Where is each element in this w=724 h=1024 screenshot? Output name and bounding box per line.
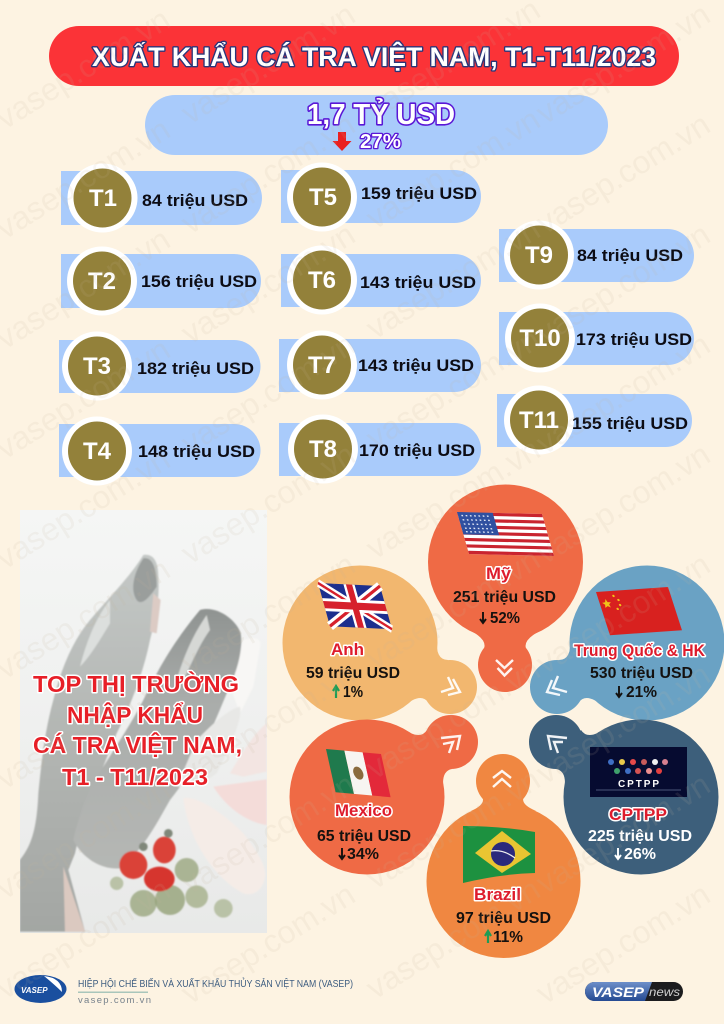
- market bubble: Trung Quốc & HK: 21%: [626, 684, 657, 701]
- footer: VASEP logo: [14, 975, 66, 1003]
- market bubble: Brazil: [426, 754, 580, 958]
- month T3: [59, 332, 260, 400]
- month T8: 170 triệu USD: [359, 441, 475, 460]
- icon: down arrow: [615, 848, 621, 859]
- market bubble: Brazil: 97 triệu USD: [456, 910, 551, 927]
- footer: VASEP news badge: VASEP: [592, 984, 645, 1000]
- icon: chevrons right: [441, 677, 460, 695]
- month T4: T4: [83, 438, 112, 465]
- month T6: 143 triệu USD: [360, 273, 476, 292]
- month T5: [281, 162, 481, 232]
- footer: VASEP news badge: [585, 982, 683, 1001]
- watermark: vasep.com.vn: vasep.com.vn: [360, 871, 546, 1006]
- market bubble: Mỹ: 251 triệu USD: [453, 589, 556, 606]
- watermark: vasep.com.vn: vasep.com.vn: [175, 546, 361, 681]
- market bubble: Anh: 59 triệu USD: [306, 665, 400, 682]
- market bubble: Mexico: Mexico: [335, 801, 392, 820]
- watermark: vasep.com.vn: vasep.com.vn: [360, 541, 546, 676]
- watermark: vasep.com.vn: vasep.com.vn: [530, 656, 716, 791]
- watermark: vasep.com.vn: vasep.com.vn: [360, 101, 546, 236]
- summary panel: total export value: 27%: [360, 131, 401, 153]
- watermark: vasep.com.vn: vasep.com.vn: [530, 546, 716, 681]
- month T7: T7: [308, 352, 336, 379]
- icon: China flag: [596, 587, 682, 635]
- market bubble: CPTPP: [529, 715, 718, 874]
- market bubble: Mexico: 65 triệu USD: [317, 828, 411, 845]
- icon: CPTPP logo: CPTPP: [618, 779, 659, 790]
- month T4: 148 triệu USD: [138, 442, 255, 461]
- summary panel: total export value: [145, 95, 608, 155]
- market bubble: Mexico: 34%: [347, 846, 379, 863]
- month T11: 155 triệu USD: [572, 414, 688, 433]
- month T2: 156 triệu USD: [141, 272, 257, 291]
- icon: down arrow: [616, 686, 622, 697]
- month T11: [497, 386, 692, 454]
- icon: chevrons left: [547, 676, 567, 695]
- month T1: [61, 164, 262, 232]
- watermark: vasep.com.vn: vasep.com.vn: [175, 216, 361, 351]
- watermark: vasep.com.vn: vasep.com.vn: [360, 651, 546, 786]
- market bubble: CPTPP: CPTPP: [609, 805, 667, 824]
- illustration: pangasius fish and tomatoes: [20, 555, 267, 932]
- market bubble: Anh: 1%: [343, 684, 363, 701]
- watermark: vasep.com.vn: vasep.com.vn: [530, 106, 716, 241]
- title banner: XUẤT KHẨU CÁ TRA VIỆT NAM, T1-T11/2023: [92, 41, 656, 72]
- footer: organisation name: [78, 977, 353, 1006]
- month T9: [499, 220, 694, 290]
- month T10: T10: [519, 325, 561, 352]
- month T3: T3: [83, 353, 111, 380]
- heading: top import markets: NHẬP KHẨU: [67, 701, 203, 728]
- market bubble: CPTPP: 225 triệu USD: [588, 828, 692, 845]
- footer: VASEP news badge: news: [649, 985, 680, 999]
- summary panel: total export value: 1,7 TỶ USD: [307, 97, 455, 131]
- watermark: vasep.com.vn: vasep.com.vn: [175, 766, 361, 901]
- heading: top import markets: [33, 670, 242, 790]
- icon: chevrons up: [493, 771, 511, 787]
- watermark: vasep.com.vn: vasep.com.vn: [360, 211, 546, 346]
- heading: top import markets: TOP THỊ TRƯỜNG: [33, 670, 239, 697]
- month T10: 173 triệu USD: [576, 330, 692, 349]
- icon: chevrons down: [496, 660, 513, 676]
- watermark: vasep.com.vn: vasep.com.vn: [360, 761, 546, 896]
- icon: UK flag: [318, 583, 392, 629]
- month T9: T9: [525, 242, 553, 269]
- month T10: [499, 304, 694, 372]
- icon: Mexico flag: [326, 749, 391, 797]
- month T8: [279, 414, 481, 484]
- month T7: [279, 330, 481, 400]
- heading: top import markets: T1 - T11/2023: [62, 764, 208, 790]
- icon: red down arrow: [332, 132, 352, 151]
- icon: chevrons up-right: [441, 736, 460, 753]
- footer: organisation name: vasep.com.vn: [78, 995, 151, 1006]
- month T1: T1: [89, 185, 117, 212]
- watermark: vasep.com.vn: vasep.com.vn: [175, 106, 361, 241]
- title banner: [49, 26, 679, 86]
- month T5: T5: [309, 184, 337, 211]
- month T7: 143 triệu USD: [358, 356, 474, 375]
- month T5: 159 triệu USD: [361, 184, 477, 203]
- market bubble: Mỹ: 52%: [490, 610, 520, 627]
- icon: US flag: [457, 512, 554, 556]
- icon: CPTPP logo: [590, 747, 687, 797]
- month T6: [281, 246, 481, 314]
- footer: organisation name: HIỆP HỘI CHẾ BIẾN VÀ XUẤT KHẨU THỦY SẢN VIỆT NAM (VASEP): [78, 977, 353, 990]
- watermark: vasep.com.vn: vasep.com.vn: [175, 326, 361, 461]
- month T1: 84 triệu USD: [142, 191, 248, 210]
- market bubble: Anh: [282, 566, 477, 720]
- month T4: [59, 416, 260, 486]
- icon: chevrons up-left: [548, 736, 567, 753]
- month T6: T6: [308, 267, 336, 294]
- market bubble: Mỹ: [428, 484, 583, 692]
- month T2: [61, 246, 261, 316]
- watermark: vasep.com.vn: vasep.com.vn: [175, 656, 361, 791]
- market bubble: Brazil: 11%: [493, 929, 523, 946]
- market bubble: Mexico: [290, 715, 478, 874]
- watermark: vasep.com.vn: vasep.com.vn: [530, 436, 716, 571]
- watermark: vasep.com.vn: vasep.com.vn: [175, 876, 361, 1011]
- heading: top import markets: CÁ TRA VIỆT NAM,: [33, 731, 242, 758]
- watermark: vasep.com.vn: vasep.com.vn: [530, 766, 716, 901]
- month T8: T8: [309, 436, 337, 463]
- icon: Brazil flag: [463, 826, 535, 883]
- market bubble: Trung Quốc & HK: 530 triệu USD: [590, 665, 693, 682]
- watermark: vasep.com.vn: vasep.com.vn: [360, 321, 546, 456]
- market bubble: Anh: Anh: [331, 640, 364, 659]
- footer: VASEP logo: VASEP: [21, 986, 48, 995]
- watermark: vasep.com.vn: vasep.com.vn: [360, 431, 546, 566]
- watermark: vasep.com.vn: vasep.com.vn: [530, 326, 716, 461]
- watermark: vasep.com.vn: vasep.com.vn: [175, 436, 361, 571]
- market bubble: Trung Quốc & HK: Trung Quốc & HK: [574, 641, 706, 660]
- month T9: 84 triệu USD: [577, 246, 683, 265]
- month T11: T11: [519, 407, 559, 434]
- icon: up arrow: [333, 686, 339, 698]
- market bubble: Mỹ: Mỹ: [486, 564, 512, 583]
- market bubble: Trung Quốc & HK: [530, 566, 724, 720]
- icon: down arrow: [339, 848, 345, 859]
- watermark: vasep.com.vn: vasep.com.vn: [530, 876, 716, 1011]
- market bubble: Brazil: Brazil: [474, 885, 521, 904]
- month T3: 182 triệu USD: [137, 359, 254, 378]
- month T2: T2: [88, 268, 116, 295]
- icon: down arrow: [480, 612, 486, 623]
- market bubble: CPTPP: 26%: [624, 846, 656, 863]
- panel: fish photo with heading: [20, 510, 267, 933]
- watermark: vasep.com.vn: vasep.com.vn: [530, 216, 716, 351]
- icon: up arrow: [485, 931, 491, 943]
